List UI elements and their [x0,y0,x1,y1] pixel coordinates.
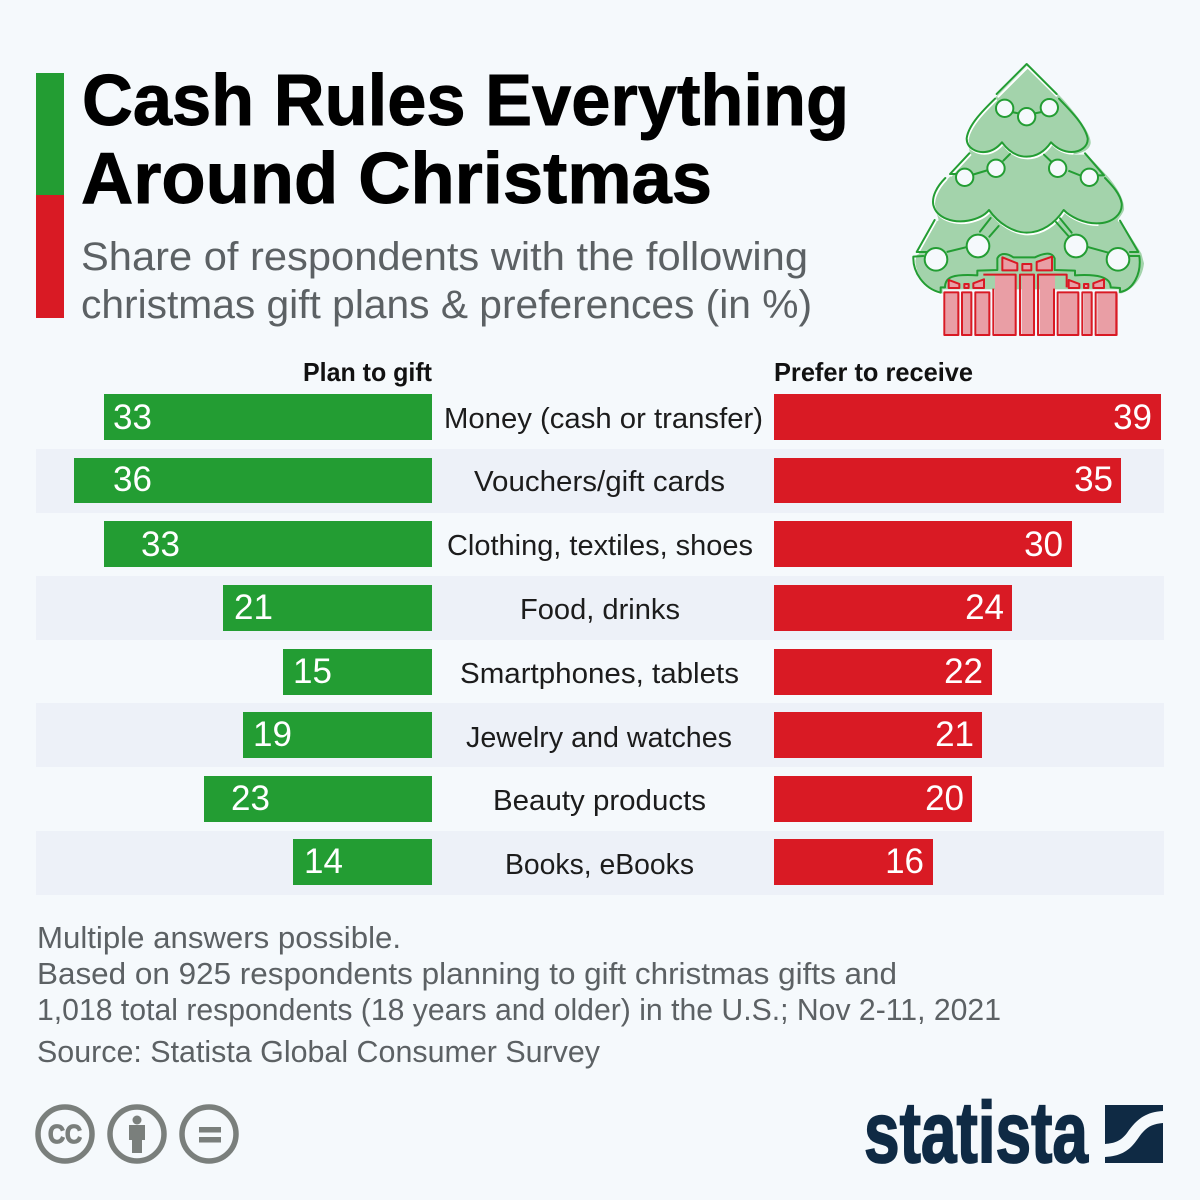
footnotes and source [37,920,1001,1069]
values: prefer to receive [885,398,1152,881]
values: prefer to receive: 35 [1074,460,1113,499]
title: Around Christmas [81,139,712,219]
icon: attribution [110,1107,164,1161]
values: prefer to receive: 20 [925,779,964,818]
values: prefer to receive: 16 [885,842,924,881]
values: prefer to receive: 39 [1113,398,1152,437]
values: prefer to receive: 21 [935,715,974,754]
category labels [444,403,763,881]
category labels: Clothing, textiles, shoes [447,530,753,562]
column heading: prefer to receive: Prefer to receive [774,357,973,387]
values: prefer to receive: 22 [944,652,983,691]
green bars: plan to gift [74,394,432,885]
values: plan to gift: 33 [113,398,152,437]
icon: cc: CC [48,1119,82,1149]
values: plan to gift: 15 [293,652,332,691]
column heading: plan to gift: Plan to gift [303,357,432,387]
icon: cc [38,1107,92,1161]
category labels: Beauty products [493,785,706,817]
category labels: Jewelry and watches [466,722,732,754]
values: plan to gift [113,398,343,881]
footnotes and source: Based on 925 respondents planning to gift christmas gifts and [37,956,897,991]
title: Cash Rules Everything [82,61,849,141]
footnotes and source: 1,018 total respondents (18 years and older) in the U.S.; Nov 2-11, 2021 [37,992,1001,1027]
category labels: Money (cash or transfer) [444,403,763,435]
icon: christmas tree with gifts [913,64,1144,336]
category labels: Food, drinks [520,594,680,626]
category labels: Smartphones, tablets [460,658,739,690]
garland lights [925,99,1129,271]
subtitle [81,235,812,327]
values: plan to gift: 36 [113,460,152,499]
values: prefer to receive: 30 [1024,525,1063,564]
statista logo: statista [864,1085,1089,1181]
footnotes and source: Multiple answers possible. [37,920,401,955]
category labels: Books, eBooks [505,849,694,881]
footnotes and source: Source: Statista Global Consumer Survey [37,1034,600,1069]
values: plan to gift: 19 [253,715,292,754]
icon: no derivatives [182,1107,236,1161]
accent bar [36,73,64,318]
row bands [36,449,1164,895]
title [81,61,849,219]
values: plan to gift: 33 [141,525,180,564]
values: plan to gift: 23 [231,779,270,818]
panel: diverging bar chart [36,394,1164,895]
category labels: Vouchers/gift cards [474,466,725,498]
tree foliage [913,64,1144,294]
gift boxes [943,257,1119,336]
red bars: prefer to receive [774,394,1161,885]
subtitle: christmas gift plans & preferences (in %) [81,283,812,327]
values: plan to gift: 14 [304,842,343,881]
subtitle: Share of respondents with the following [81,235,808,279]
values: plan to gift: 21 [234,588,273,627]
icons: creative commons licence [38,1107,236,1161]
values: prefer to receive: 24 [965,588,1004,627]
